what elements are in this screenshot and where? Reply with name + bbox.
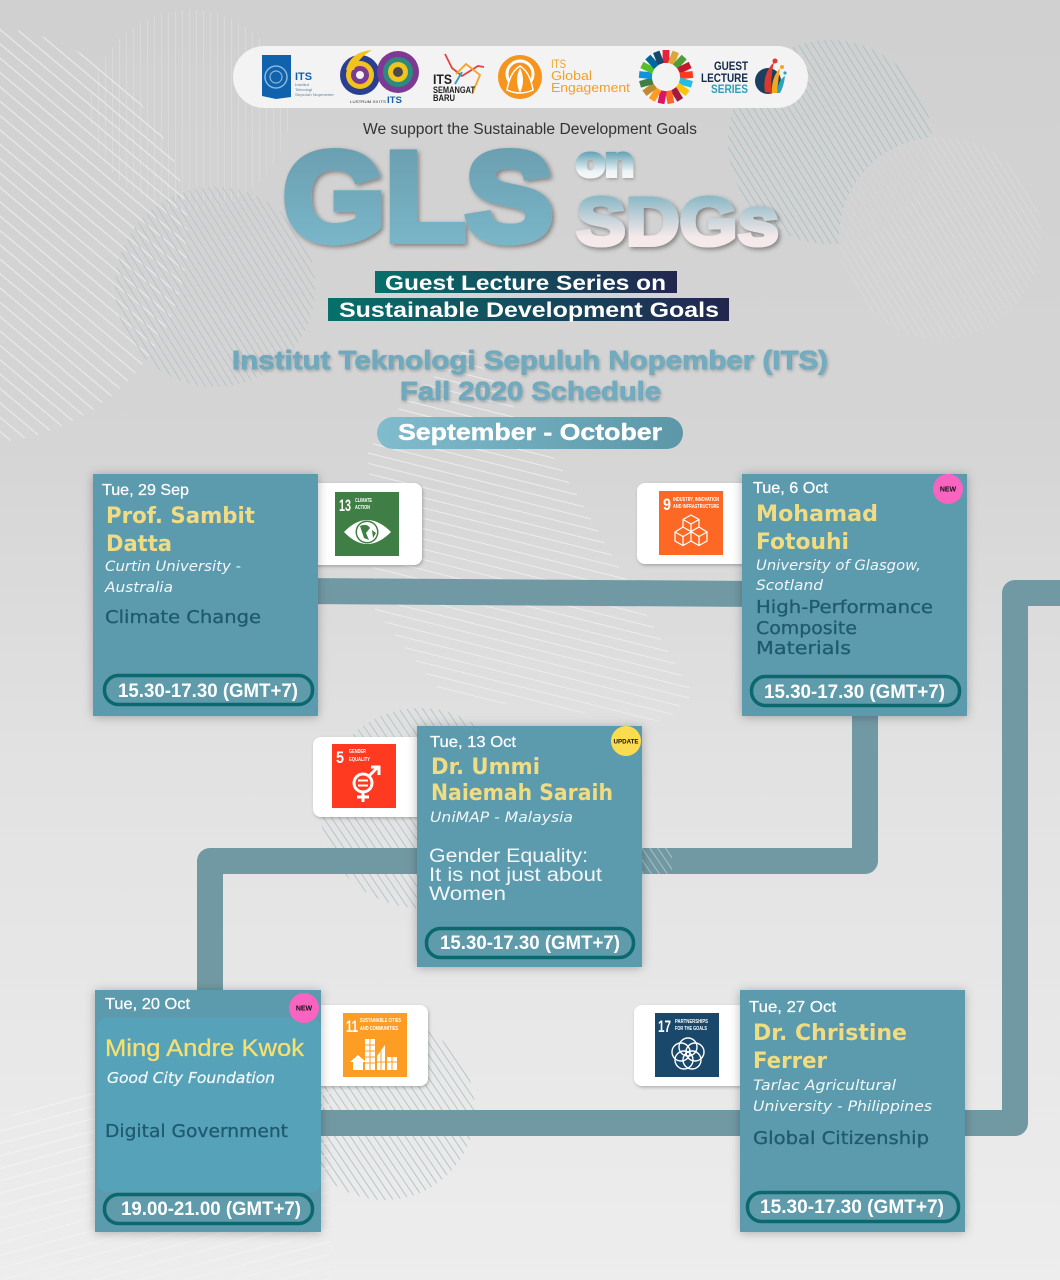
session 1 time: 15.30-17.30 (GMT+7) [118, 681, 298, 702]
logo: ITS Global Engagement: Engagement [551, 80, 630, 95]
session 4 time [104, 1194, 312, 1224]
heading: institute and schedule [232, 345, 828, 406]
icon: SDG 5 gender equality [332, 744, 396, 808]
session 2 time: 15.30-17.30 (GMT+7) [764, 682, 945, 703]
panel: session 5 card [740, 990, 965, 1232]
icon: SDG 11 sustainable cities: 11 [346, 1017, 358, 1036]
logo: Guest Lecture Series: GUEST [714, 59, 749, 73]
session 1 date: Tue, 29 Sep [102, 482, 189, 499]
icon: SDG 11 sustainable cities [343, 1013, 407, 1077]
logo: ITS institute [262, 55, 335, 99]
heading: institute and schedule: Fall 2020 Schedule [400, 376, 661, 406]
heading: institute and schedule: Institut Teknologi Sepuluh Nopember (ITS) [232, 345, 828, 375]
session 2 affiliation [756, 558, 921, 594]
logo: Guest Lecture Series: SERIES [711, 82, 748, 96]
panel: session 4 goal tile [305, 1005, 428, 1086]
session 2 topic: Materials [756, 638, 851, 659]
session 5 speaker [753, 1021, 907, 1074]
icon: SDG 13 climate action: 13 [339, 496, 351, 515]
session 5 topic: Global Citizenship [753, 1128, 929, 1149]
icon: SDG 17 partnerships: FOR THE GOALS [675, 1026, 708, 1032]
session 2 date: Tue, 6 Oct [753, 480, 829, 497]
badge: new: NEW [296, 1006, 313, 1012]
session 5 affiliation: University - Philippines [753, 1099, 932, 1115]
logo: ITS Semangat Baru: BARU [433, 93, 455, 103]
badge: new [289, 993, 319, 1023]
logo: ITS institute: Sepuluh Nopember [295, 92, 335, 97]
panel: session 2 card [742, 474, 967, 716]
session 2 affiliation: Scotland [756, 578, 823, 594]
icon: SDG 11 sustainable cities: AND COMMUNITIES [360, 1026, 399, 1032]
icon: SDG 17 partnerships: 17 [658, 1017, 671, 1036]
session 4 affiliation: Good City Foundation [107, 1069, 275, 1087]
logo: ITS Semangat Baru: ITS [433, 71, 452, 87]
icon: SDG 11 sustainable cities: SUSTAINABLE CITIES [360, 1018, 402, 1024]
logo: SDG colour wheel [639, 50, 693, 104]
session 3 time [426, 928, 634, 958]
logo: ITS Semangat Baru [433, 54, 484, 103]
session 3 topic: It is not just about [429, 865, 603, 886]
logo: ITS institute: Teknologi [295, 87, 312, 92]
session 1 topic: Climate Change [105, 607, 261, 628]
session 5 date: Tue, 27 Oct [749, 999, 837, 1016]
date range pill [377, 417, 683, 449]
logo: ITS Global Engagement: ITS [551, 57, 566, 71]
icon: SDG 13 climate action [335, 492, 399, 556]
icon: SDG 5 gender equality: 5 [336, 748, 344, 767]
icon: SDG 13 climate action: ACTION [355, 505, 370, 511]
icon: SDG 9 industry and innovation: INDUSTRY, INNOVATION [673, 497, 719, 503]
logo: ITS 60 years [340, 50, 419, 105]
logo: ITS Global Engagement [498, 55, 630, 99]
badge: update [611, 726, 641, 756]
connector path: card 2 to card 3 [630, 700, 865, 861]
icon: SDG 9 industry and innovation [659, 491, 723, 555]
title: GLS: GLS [283, 126, 553, 267]
logo: Guest Lecture Series [701, 58, 787, 96]
session 3 topic [429, 846, 603, 905]
badge: new [933, 474, 963, 504]
logo: Guest Lecture Series: LECTURE [701, 71, 748, 85]
icon: SDG 5 gender equality: EQUALITY [349, 757, 371, 763]
panel: session 5 goal tile [634, 1005, 754, 1086]
session 2 affiliation: University of Glasgow, [756, 558, 921, 574]
session 4 date: Tue, 20 Oct [105, 996, 191, 1013]
session 5 affiliation [753, 1078, 932, 1115]
session 5 time [748, 1192, 958, 1222]
subtitle banner line 1: Guest Lecture Series on [385, 272, 666, 295]
session 3 speaker: Dr. Ummi [431, 755, 540, 780]
title: on: on [576, 138, 634, 185]
logo: ITS Semangat Baru: SEMANGAT [433, 85, 475, 95]
session 2 time [752, 676, 960, 706]
panel: session 3 goal tile [313, 737, 433, 817]
session 2 speaker: Mohamad [756, 502, 878, 527]
badge: update: UPDATE [614, 738, 639, 746]
subtitle banner line 2: Sustainable Development Goals [339, 299, 719, 322]
panel: session 1 card [93, 474, 318, 716]
session 4 time: 19.00-21.00 (GMT+7) [121, 1199, 301, 1220]
panel: session 2 goal tile [637, 483, 757, 564]
title: SDGs: SDGs [576, 184, 779, 260]
badge: new: NEW [940, 486, 957, 494]
logo: ITS 60 years: LUSTRUM XII ITS [350, 99, 386, 104]
logo: ITS 60 years: ITS [387, 95, 402, 105]
session 4 topic: Digital Government [105, 1121, 288, 1142]
icon: SDG 17 partnerships [655, 1013, 719, 1077]
session 5 speaker: Dr. Christine [753, 1021, 907, 1046]
date range pill: September - October [398, 419, 662, 445]
session 3 date: Tue, 13 Oct [430, 734, 517, 751]
logo: ITS Global Engagement: Global [551, 68, 592, 83]
session 1 time [104, 676, 312, 704]
session 2 topic: Composite [756, 618, 857, 639]
icon: SDG 9 industry and innovation: AND INFRASTRUCTURE [673, 504, 720, 510]
session 5 affiliation: Tarlac Agricultural [753, 1078, 896, 1094]
session 1 speaker: Datta [106, 532, 172, 557]
session 5 time: 15.30-17.30 (GMT+7) [760, 1197, 944, 1218]
session 2 topic [756, 597, 933, 659]
session 2 speaker [756, 502, 878, 555]
session 3 speaker: Naiemah Saraih [431, 781, 613, 806]
icon: SDG 13 climate action: CLIMATE [355, 498, 373, 504]
icon: SDG 9 industry and innovation: 9 [663, 495, 671, 514]
panel: session 1 goal tile [300, 483, 422, 565]
connector path: card 4 to card 5 [310, 1110, 750, 1136]
session 4 speaker: Ming Andre Kwok [105, 1035, 305, 1062]
session 2 speaker: Fotouhi [756, 530, 849, 555]
session 3 topic: Women [429, 884, 506, 905]
connector path: card 1 to card 2 [300, 591, 760, 594]
panel: session 4 card [95, 990, 321, 1232]
tagline: We support the Sustainable Development Goals [363, 121, 697, 138]
session 1 speaker [106, 504, 255, 557]
logo bar [233, 46, 808, 108]
session 5 speaker: Ferrer [753, 1049, 827, 1074]
session 1 affiliation [104, 559, 241, 596]
session 1 affiliation: Australia [104, 580, 173, 596]
icon: SDG 17 partnerships: PARTNERSHIPS [675, 1019, 709, 1025]
icon: SDG 5 gender equality: GENDER [349, 749, 366, 755]
session 3 topic: Gender Equality: [429, 846, 588, 867]
connector path: card 5 to page edge [950, 593, 1060, 1123]
session 3 affiliation: UniMAP - Malaysia [430, 810, 573, 826]
session 3 speaker [431, 755, 613, 806]
logo: ITS institute: ITS [295, 71, 312, 83]
panel: session 3 card [417, 726, 642, 967]
logo: ITS institute: Institut [295, 82, 310, 87]
session 2 topic: High-Performance [756, 597, 933, 618]
session 1 affiliation: Curtin University - [105, 559, 241, 575]
connector path: card 3 to card 4 [210, 861, 430, 1000]
session 1 speaker: Prof. Sambit [106, 504, 255, 529]
session 3 time: 15.30-17.30 (GMT+7) [440, 933, 620, 954]
